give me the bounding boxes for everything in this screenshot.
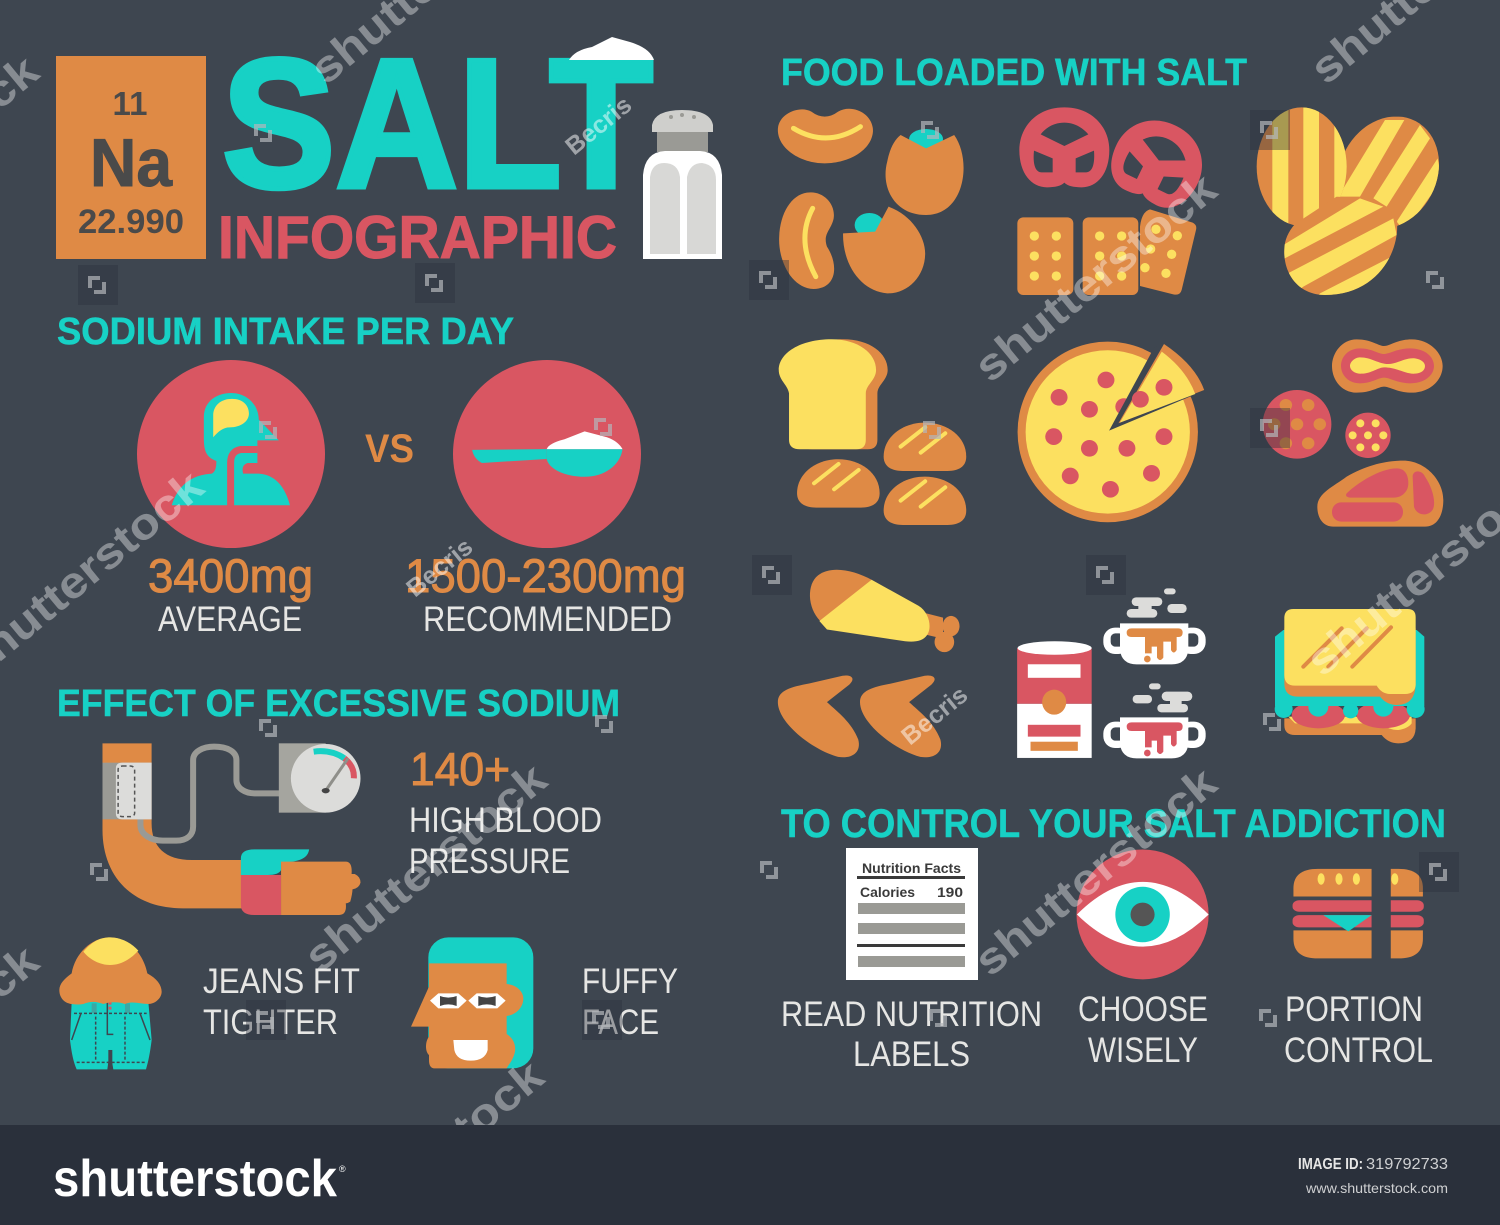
label: jeans fit tighter: TIGHTER xyxy=(203,1003,338,1042)
icon: nutrition facts label: 190 xyxy=(937,884,963,900)
label: read nutrition labels xyxy=(781,995,1042,1074)
label: read nutrition labels: READ NUTRITION xyxy=(781,995,1042,1034)
footer bar xyxy=(0,1125,1500,1225)
stat: 140+ high blood pressure xyxy=(409,743,602,881)
icon: head and throat on red circle xyxy=(137,360,325,548)
icon: pizza xyxy=(1018,342,1209,522)
title block: sodium element tile: 11 xyxy=(113,85,147,122)
label: read nutrition labels: LABELS xyxy=(853,1035,970,1074)
icon: pretzels and crackers xyxy=(1017,106,1216,295)
label: choose wisely: WISELY xyxy=(1088,1031,1198,1070)
icon: blood pressure arm with gauge xyxy=(102,743,361,915)
watermark: shutterstock stamps: shutterstock xyxy=(295,754,556,982)
heading: sodium intake per day: SODIUM INTAKE PER DAY xyxy=(57,311,514,353)
stat: 1500-2300mg recommended xyxy=(405,549,686,639)
title: INFOGRAPHIC: INFOGRAPHIC xyxy=(218,204,617,271)
watermark: shutterstock stamps: Becris xyxy=(560,91,637,161)
icon: muffin top over tight jeans xyxy=(59,937,162,1069)
footer bar: 319792733 xyxy=(1366,1156,1448,1173)
icon: nutrition facts label xyxy=(846,848,978,980)
watermark: shutterstock stamps: shutterstock xyxy=(965,758,1226,986)
icon: chicken drumstick and wings xyxy=(778,570,960,757)
footer image id: IMAGE ID: xyxy=(1298,1156,1363,1173)
stat: 3400mg average xyxy=(148,549,313,639)
icon: grilled sandwich xyxy=(1275,609,1425,743)
label: choose wisely xyxy=(1078,990,1208,1070)
stat: 1500-2300mg recommended: 1500-2300mg xyxy=(405,549,686,602)
label: VS: VS xyxy=(365,427,414,471)
footer bar: www.shutterstock.com xyxy=(1305,1180,1448,1196)
icon: nuts xyxy=(778,109,964,293)
label: fuffy face: FUFFY xyxy=(582,962,678,1001)
stat: 140+ high blood pressure: PRESSURE xyxy=(409,842,570,881)
label: fuffy face xyxy=(582,962,678,1042)
icon: potato chips xyxy=(1255,107,1442,300)
stat: 140+ high blood pressure: HIGH BLOOD xyxy=(409,801,602,840)
stat: 1500-2300mg recommended: RECOMMENDED xyxy=(423,600,672,639)
icon: salt heap on title xyxy=(569,37,654,60)
heading: food loaded with salt: FOOD LOADED WITH SALT xyxy=(781,52,1247,94)
stat: 140+ high blood pressure: 140+ xyxy=(410,743,510,795)
label: jeans fit tighter: JEANS FIT xyxy=(203,962,360,1001)
title block: sodium element tile xyxy=(56,56,206,259)
label: choose wisely: CHOOSE xyxy=(1078,990,1208,1029)
icon: salt shaker xyxy=(643,110,722,259)
heading: to control your salt addiction: TO CONTROL YOUR SALT ADDICTION xyxy=(781,802,1446,846)
label: portion control: CONTROL xyxy=(1284,1031,1433,1070)
watermark: shutterstock stamps: Becris xyxy=(896,681,973,751)
footer logo: shutterstock xyxy=(53,1150,337,1208)
icon: eye on red circle xyxy=(1076,850,1209,979)
icon: cured meats xyxy=(1263,339,1443,527)
title: SALT: SALT xyxy=(222,20,653,226)
label: portion control: PORTION xyxy=(1285,990,1423,1029)
icon: bread and rolls xyxy=(779,339,966,525)
label: fuffy face: FACE xyxy=(582,1003,659,1042)
watermark: shutterstock stamps: Becris xyxy=(401,533,478,603)
icon: burger with portion split xyxy=(1293,864,1424,962)
title block: sodium element tile: Na xyxy=(90,125,173,201)
title block: sodium element tile: 22.990 xyxy=(78,203,184,241)
stat: 3400mg average: AVERAGE xyxy=(158,600,302,639)
label: portion control xyxy=(1284,990,1433,1070)
label: jeans fit tighter xyxy=(203,962,360,1042)
icon: nutrition facts label: Calories xyxy=(860,884,915,900)
icon: nutrition facts label: Nutrition Facts xyxy=(862,860,961,876)
stat: 3400mg average: 3400mg xyxy=(148,549,313,602)
icon: canned soup and bowls xyxy=(1017,588,1206,758)
icon: puffy face xyxy=(411,937,533,1068)
watermark: small corner marks xyxy=(78,110,1459,1040)
heading: effect of excessive sodium: EFFECT OF EXCESSIVE SODIUM xyxy=(57,683,620,725)
footer bar: ® xyxy=(339,1164,346,1174)
watermark: shutterstock stamps: shutterstock xyxy=(965,164,1226,392)
icon: spoon of salt on red circle xyxy=(453,360,641,548)
